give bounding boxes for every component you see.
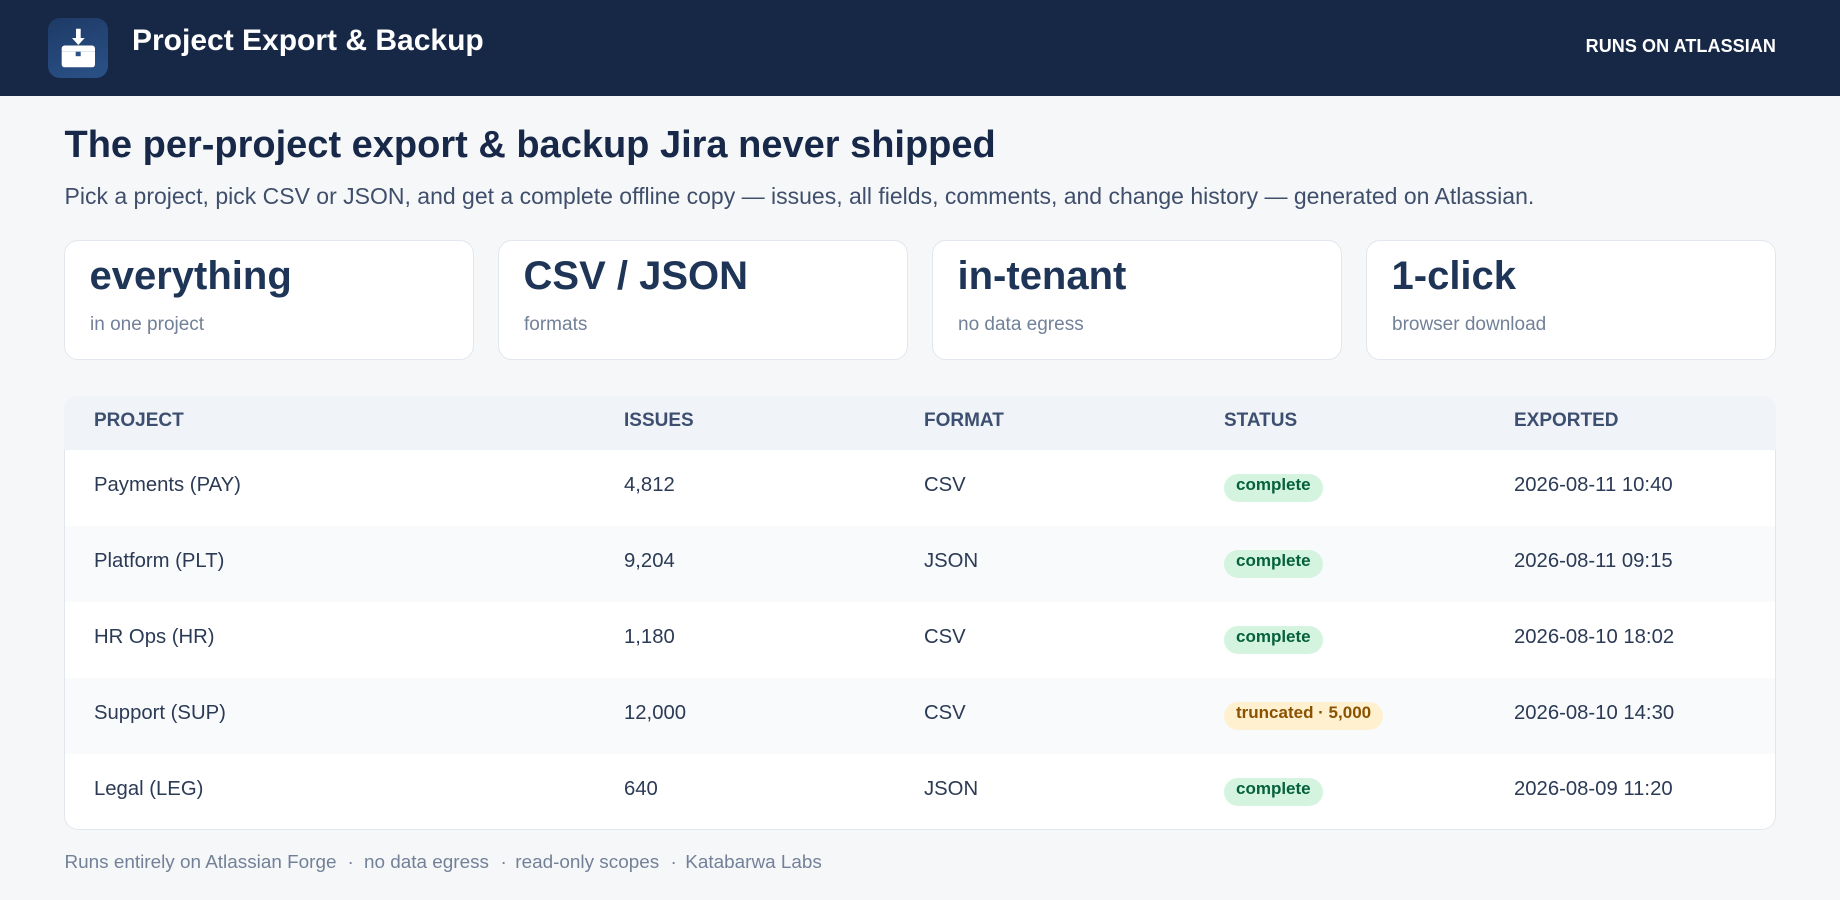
app title: Project Export & Backup bbox=[132, 24, 484, 57]
stat card: formats: formats bbox=[524, 314, 587, 335]
header badge: RUNS ON ATLASSIAN bbox=[1586, 36, 1776, 56]
row: Legal: 2026-08-09 11:20 bbox=[1514, 778, 1673, 800]
footer note: read-only scopes bbox=[515, 852, 659, 873]
stat card: everything: everything bbox=[90, 254, 292, 298]
row: Support: Support (SUP) bbox=[94, 702, 226, 724]
row: HR Ops: CSV bbox=[924, 626, 966, 648]
footer note: Runs entirely on Atlassian Forge bbox=[64, 852, 336, 873]
row: Support: 12,000 bbox=[624, 702, 686, 724]
stat card: 1-click bbox=[1366, 240, 1776, 360]
row: Payments: Payments (PAY) bbox=[94, 474, 241, 496]
icon: export box bbox=[48, 18, 108, 78]
row: HR Ops bbox=[65, 602, 1775, 678]
stat card: everything: in one project bbox=[90, 314, 204, 335]
row: HR Ops: 2026-08-10 18:02 bbox=[1514, 626, 1674, 648]
stat card: 1-click: 1-click bbox=[1392, 254, 1516, 298]
table header: STATUS bbox=[1224, 410, 1297, 431]
table header: ISSUES bbox=[624, 410, 694, 431]
row: Payments: 4,812 bbox=[624, 474, 675, 496]
table header: EXPORTED bbox=[1514, 410, 1619, 431]
row: Legal bbox=[94, 778, 1673, 806]
headline: The per-project export & backup Jira never shipped bbox=[64, 124, 996, 166]
row: Support: truncated · 5,000 bbox=[1236, 703, 1371, 722]
footer note: · bbox=[500, 852, 507, 873]
row: Legal: Legal (LEG) bbox=[94, 778, 203, 800]
stat card: in-tenant: no data egress bbox=[958, 314, 1084, 335]
stat card: formats: CSV / JSON bbox=[524, 254, 748, 298]
row: Support: CSV bbox=[924, 702, 966, 724]
header bar bbox=[0, 0, 1840, 96]
row: HR Ops: HR Ops (HR) bbox=[94, 626, 215, 648]
row: Support bbox=[65, 678, 1775, 754]
row: Platform bbox=[65, 526, 1775, 602]
stat card: in-tenant bbox=[932, 240, 1342, 360]
footer note: Katabarwa Labs bbox=[685, 852, 822, 873]
row: HR Ops: 1,180 bbox=[624, 626, 675, 648]
row: HR Ops: complete bbox=[1236, 627, 1311, 646]
row: Payments: complete bbox=[1236, 475, 1311, 494]
row: Payments: 2026-08-11 10:40 bbox=[1514, 474, 1673, 496]
row: Platform: 9,204 bbox=[624, 550, 675, 572]
row: Support: 2026-08-10 14:30 bbox=[1514, 702, 1674, 724]
exports table bbox=[64, 396, 1776, 830]
table header: FORMAT bbox=[924, 410, 1004, 431]
table header: PROJECT bbox=[94, 410, 184, 431]
row: Platform: Platform (PLT) bbox=[94, 550, 224, 572]
footer note: · bbox=[670, 852, 677, 873]
row: Payments bbox=[65, 450, 1775, 526]
table header bbox=[64, 396, 1776, 450]
row: Platform: 2026-08-11 09:15 bbox=[1514, 550, 1673, 572]
row: Platform: complete bbox=[1236, 551, 1311, 570]
stat card: formats bbox=[498, 240, 908, 360]
row: Legal: 640 bbox=[624, 778, 658, 800]
footer note: no data egress bbox=[364, 852, 489, 873]
subheading: Pick a project, pick CSV or JSON, and get a complete offline copy — issues, all fields, comments, and change history — generated on Atlassian. bbox=[64, 183, 1534, 209]
row: Legal: complete bbox=[1236, 779, 1311, 798]
stat card: everything bbox=[64, 240, 474, 360]
stat card: in-tenant: in-tenant bbox=[958, 254, 1126, 298]
footer note: · bbox=[348, 852, 354, 873]
footer note bbox=[64, 852, 822, 873]
row: Platform: JSON bbox=[924, 550, 978, 572]
stat card: 1-click: browser download bbox=[1392, 314, 1546, 335]
row: Payments: CSV bbox=[924, 474, 966, 496]
row: Legal: JSON bbox=[924, 778, 978, 800]
